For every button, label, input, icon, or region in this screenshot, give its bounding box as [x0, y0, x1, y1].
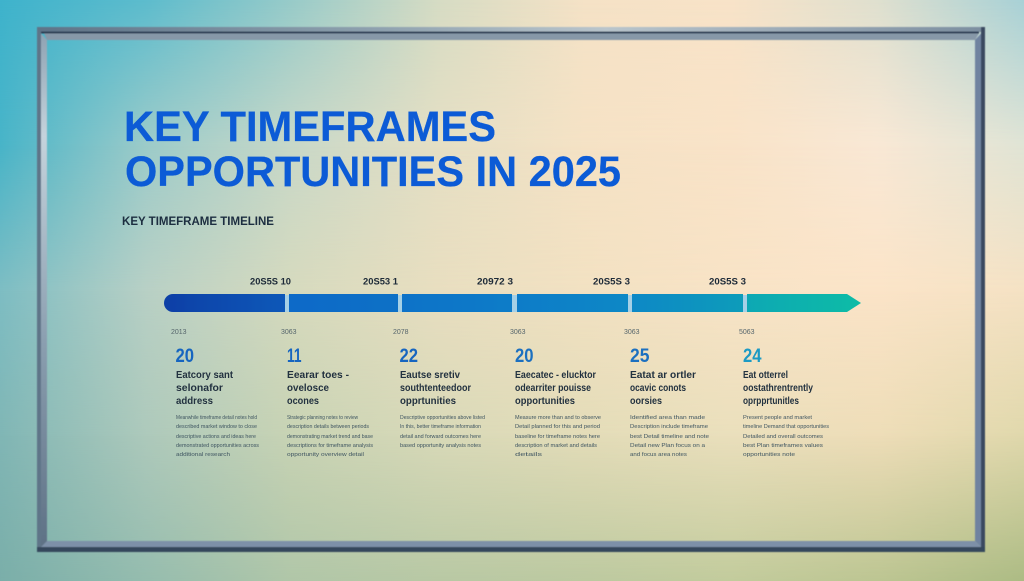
column 1: Meanwhile timeframe detail notes hold	[176, 415, 257, 421]
column 4: Detail planned for this and period	[515, 424, 600, 430]
column 3: based opportunity analysis notes	[400, 443, 481, 449]
column 6: timeline Demand that opportunities	[743, 424, 829, 430]
column 6: Eat otterrel	[743, 369, 788, 381]
column 1: described market window to close	[176, 424, 257, 430]
timeline period labels: 20S5S 10	[250, 276, 291, 288]
column 2: 11	[287, 346, 302, 367]
column 1: demonstrated opportunities across	[176, 443, 259, 449]
column 5: oorsies	[630, 395, 662, 407]
column 6: opportunities note	[743, 452, 795, 458]
column 4: 20	[515, 346, 534, 367]
column 1: additional research	[176, 452, 230, 458]
column 3: southtenteedoor	[400, 382, 471, 394]
column 2: description details between periods	[287, 424, 369, 430]
column 5: Description include timeframe	[630, 424, 708, 430]
column 2: 3063	[281, 329, 297, 336]
column 1: Eatcory sant	[176, 369, 233, 381]
column 1: descriptive actions and ideas here	[176, 434, 256, 440]
column 3: In this, better timeframe information	[400, 424, 481, 430]
column 4: Measure more than and to observe	[515, 415, 601, 421]
column 4: baseline for timeframe notes here	[515, 434, 600, 440]
column 5: 25	[630, 346, 650, 367]
column 5: Eatat ar ortler	[630, 369, 696, 381]
timeline period labels	[250, 276, 746, 288]
column 3	[393, 329, 485, 449]
column 4: details	[515, 452, 542, 458]
timeline period labels: 20S53 1	[363, 276, 399, 288]
column 5: 3063	[624, 329, 640, 336]
column 2: Strategic planning notes to review	[287, 415, 359, 421]
column 6: best Plan timeframes values	[743, 443, 823, 449]
column 5: and focus area notes	[630, 452, 687, 458]
column 6: Detailed and overall outcomes	[743, 434, 823, 440]
column 1: 20	[176, 346, 194, 367]
column 4: odearriter pouisse	[515, 382, 591, 394]
column 2: descriptions for timeframe analysis	[287, 443, 373, 449]
column 3: 22	[400, 346, 418, 367]
column 6: 5063	[739, 329, 755, 336]
title: KEY TIMEFRAMES	[124, 103, 496, 151]
column 2: opportunity overview detail	[287, 452, 364, 458]
timeline period labels: 20S5S 3	[593, 276, 630, 288]
column 3: detail and forward outcomes here	[400, 434, 481, 440]
column 6: 24	[743, 346, 762, 367]
column 4	[510, 329, 601, 458]
column 4: description of market and details	[515, 443, 597, 449]
column 3: 2078	[393, 329, 409, 336]
column 1	[171, 329, 259, 458]
column 4: opportunities	[515, 395, 575, 407]
column 2	[281, 329, 373, 458]
column 1: selonafor	[176, 382, 223, 394]
column 6	[739, 329, 829, 458]
timeline period labels: 20S5S 3	[709, 276, 746, 288]
column 4: 3063	[510, 329, 526, 336]
column 4: Eaecatec - elucktor	[515, 369, 596, 381]
column 3: opprtunities	[400, 395, 456, 407]
column 5	[624, 329, 709, 458]
column 2: demonstrating market trend and base	[287, 434, 373, 440]
title: OPPORTUNITIES IN 2025	[125, 148, 621, 196]
column 1: 2013	[171, 329, 187, 336]
column 1: address	[176, 395, 213, 407]
column 2: ovelosce	[287, 382, 329, 394]
column 5: best Detail timeline and note	[630, 434, 709, 440]
column 6: Present people and market	[743, 415, 812, 421]
column 2: ocones	[287, 395, 319, 407]
column 2: Eearar toes -	[287, 369, 349, 381]
column 3: Descriptive opportunities above listed	[400, 415, 485, 421]
column 3: Eautse sretiv	[400, 369, 460, 381]
column 6: oostathrentrently	[743, 382, 813, 394]
timeline arrow bar	[164, 294, 861, 312]
column 5: ocavic conots	[630, 382, 686, 394]
column 6: oprpprtunitles	[743, 395, 799, 407]
timeline period labels: 20972 3	[477, 276, 513, 288]
column 5: Identified area than made	[630, 415, 705, 421]
title	[124, 103, 621, 196]
subtitle: KEY TIMEFRAME TIMELINE	[122, 216, 274, 228]
column 5: Detail new Plan focus on a	[630, 443, 706, 449]
